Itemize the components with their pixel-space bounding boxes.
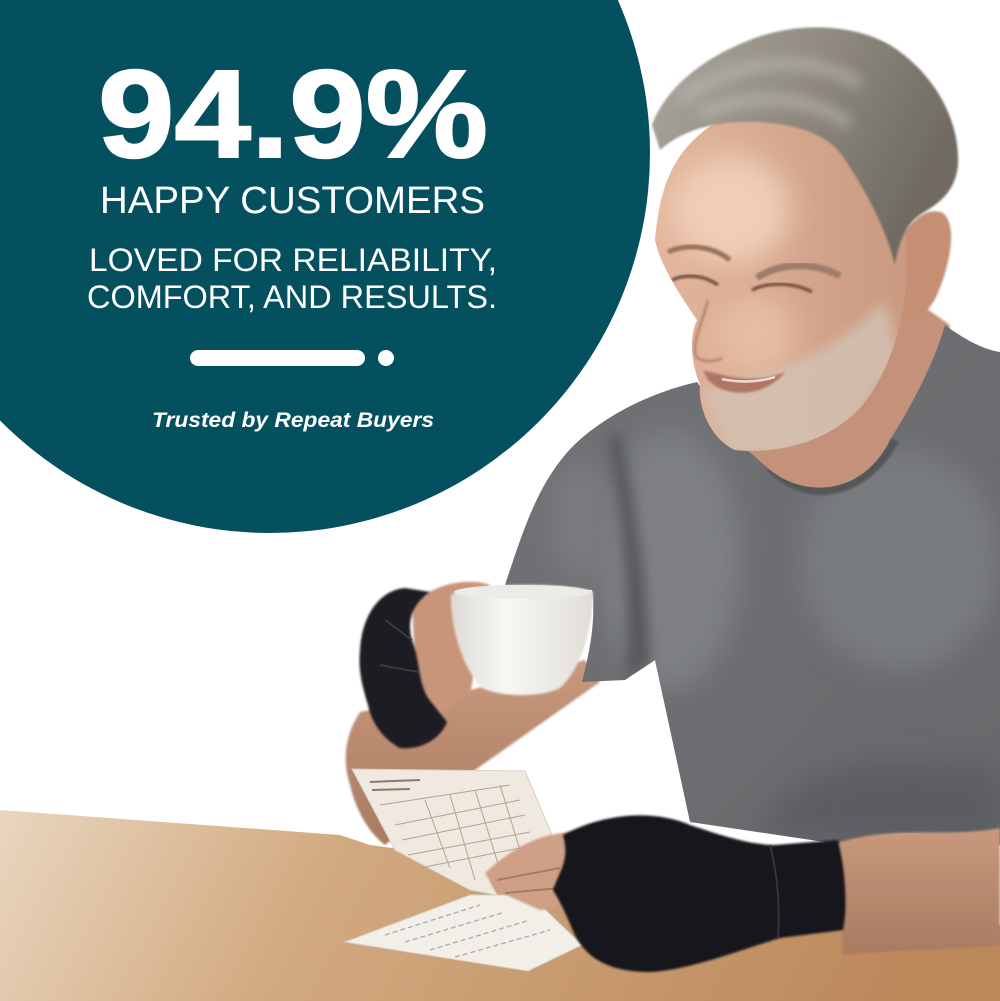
- lower notebook page: [345, 895, 582, 971]
- hair: [652, 27, 958, 265]
- face: [655, 120, 907, 451]
- tagline: Trusted by Repeat Buyers: [152, 408, 434, 432]
- left hand fingers: [412, 582, 490, 716]
- panel: teal stat circle: [0, 0, 650, 533]
- ear: [890, 211, 951, 320]
- left forearm: [346, 660, 600, 845]
- description text: COMFORT, AND RESULTS.: [87, 279, 497, 315]
- left compression glove: [359, 588, 447, 748]
- grey t-shirt: [490, 310, 1000, 850]
- upper notebook page with puzzle grid: [352, 769, 552, 895]
- right hand: [485, 832, 575, 910]
- description text: [87, 242, 497, 315]
- white coffee cup: [451, 585, 593, 695]
- wooden table: [0, 810, 1000, 1001]
- divider: bar and dot: [190, 350, 394, 366]
- right forearm: [838, 828, 1000, 955]
- headline stat: 94.9%: [98, 45, 488, 184]
- subheading: HAPPY CUSTOMERS: [100, 180, 485, 222]
- description text: LOVED FOR RELIABILITY,: [89, 242, 497, 278]
- neck: [730, 290, 950, 497]
- hair highlights: [680, 64, 860, 125]
- right compression glove: [553, 815, 845, 972]
